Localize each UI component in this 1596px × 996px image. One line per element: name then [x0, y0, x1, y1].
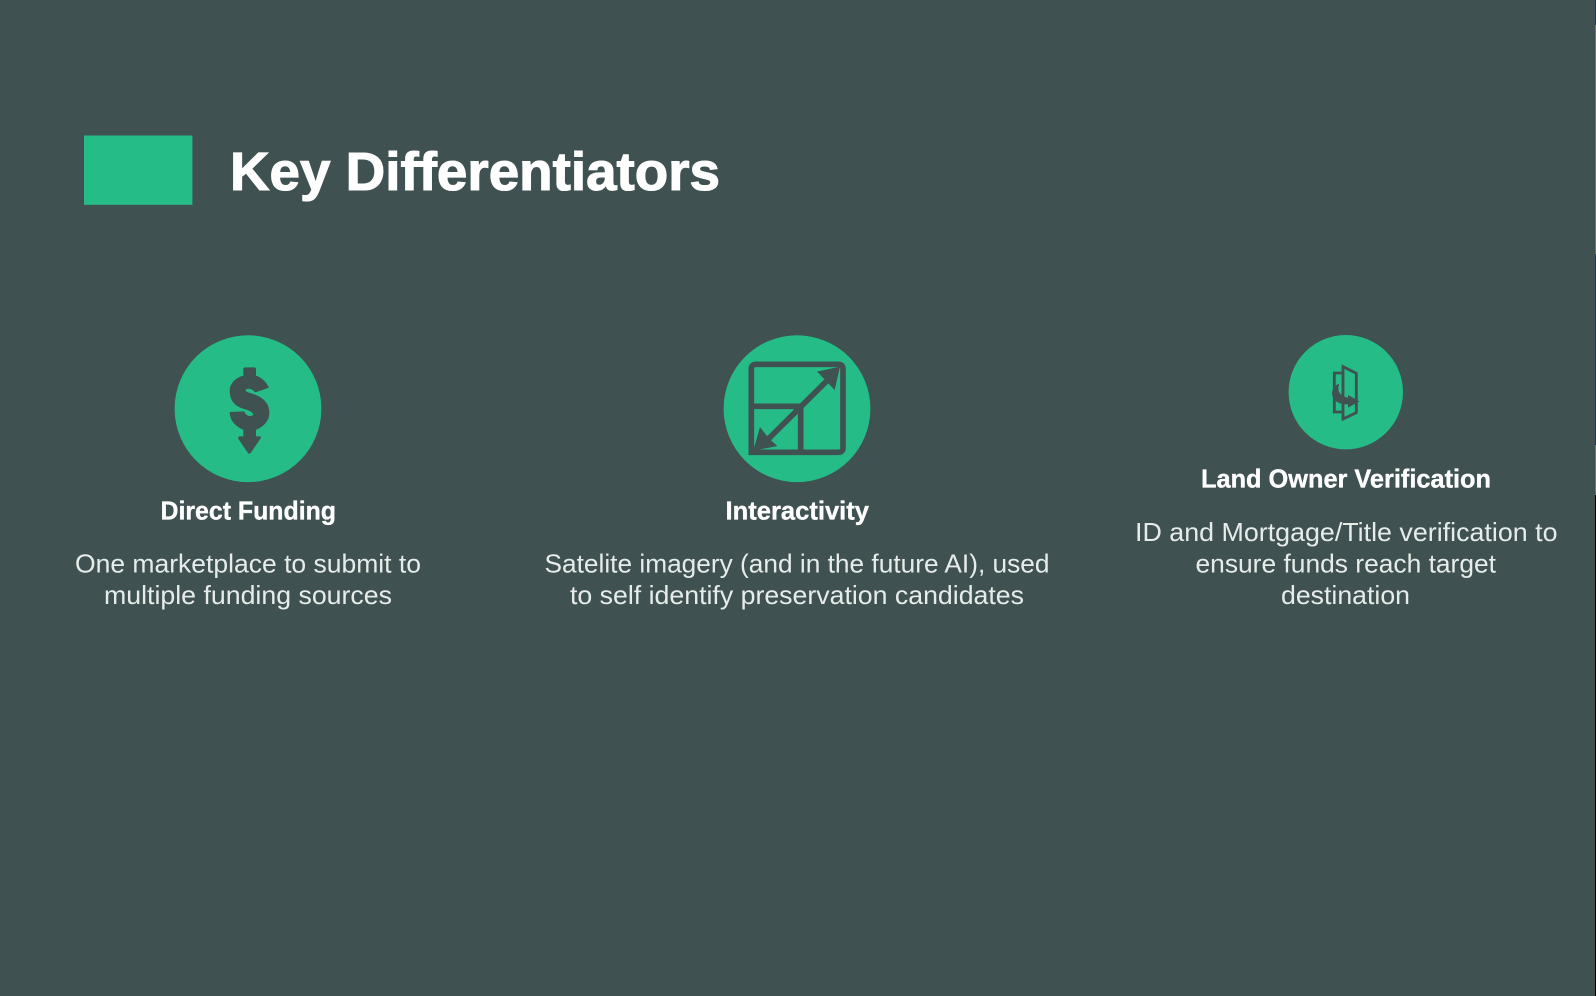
text: land owner verification description: destination — [1281, 580, 1410, 610]
text: interactivity description: Satelite imagery (and in the future AI), used — [544, 548, 1050, 578]
heading: land owner verification: Land Owner Verification — [1201, 464, 1491, 494]
panel: interactivity — [544, 335, 1050, 610]
heading: interactivity: Interactivity — [726, 496, 870, 526]
panel: direct funding — [75, 335, 421, 610]
title: Key Differentiators — [230, 142, 720, 202]
text: direct funding description — [75, 548, 421, 610]
text: interactivity description — [544, 548, 1050, 610]
icon: map with diagonal arrows — [724, 335, 870, 482]
panel: land owner verification — [1135, 335, 1558, 610]
text: interactivity description: to self identify preservation candidates — [570, 580, 1024, 610]
text: land owner verification description: ID and Mortgage/Title verification to — [1135, 517, 1558, 547]
text: direct funding description: One marketplace to submit to — [75, 548, 421, 578]
text: land owner verification description — [1135, 517, 1558, 610]
icon: door with arrow — [1289, 335, 1403, 449]
title accent block — [84, 136, 192, 205]
text: land owner verification description: ensure funds reach target — [1196, 548, 1497, 578]
icon: dollar with down arrow — [175, 335, 321, 482]
heading: direct funding: Direct Funding — [160, 496, 336, 526]
text: direct funding description: multiple funding sources — [104, 580, 392, 610]
